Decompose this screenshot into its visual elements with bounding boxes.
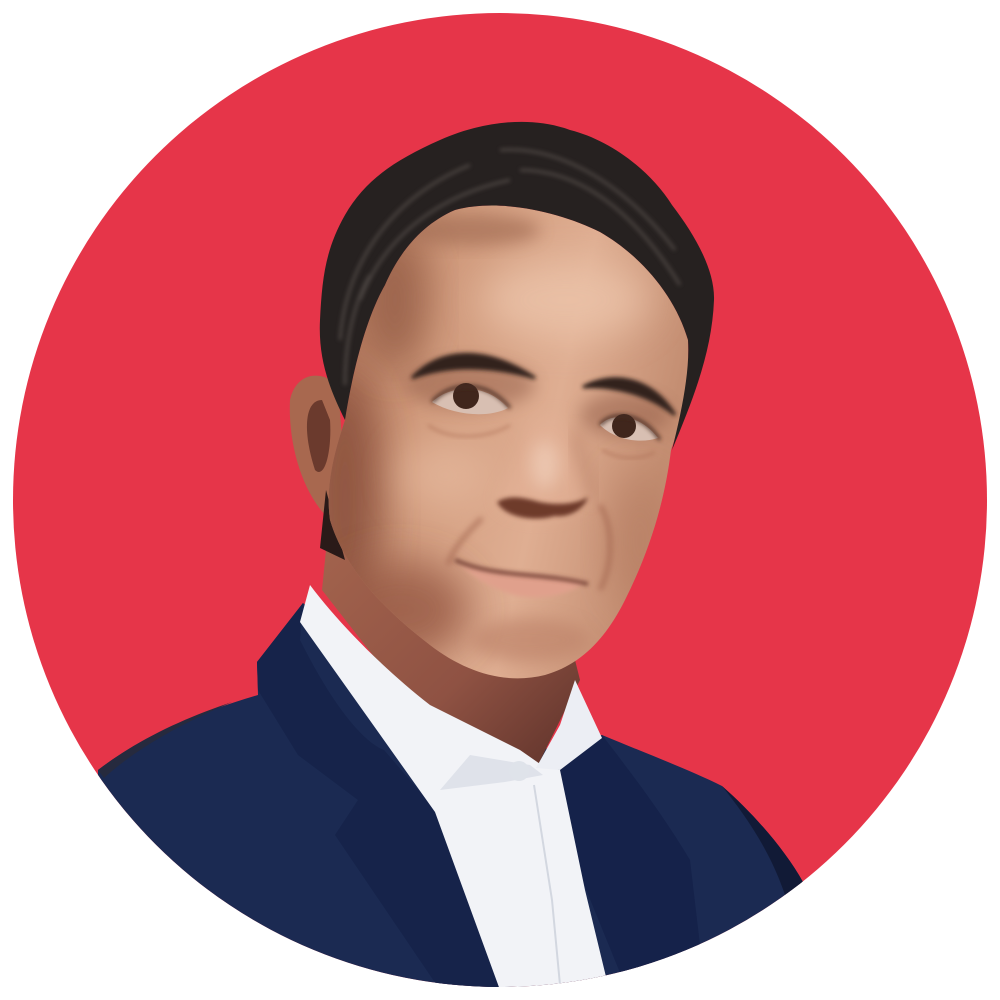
face shading — [307, 214, 670, 662]
left eye — [428, 383, 510, 436]
shadow behind jaw — [320, 490, 345, 560]
hair highlights — [340, 150, 680, 385]
person — [98, 122, 803, 1000]
right eye — [600, 414, 660, 458]
left eyebrow — [412, 354, 535, 378]
jacket — [98, 603, 803, 1000]
right eyebrow — [583, 379, 675, 415]
neck — [322, 550, 580, 763]
mouth — [455, 560, 588, 597]
smile lines — [448, 505, 610, 590]
shirt — [300, 585, 608, 990]
hair — [320, 122, 714, 450]
nose — [494, 435, 591, 522]
ear — [290, 376, 345, 518]
face — [307, 206, 688, 678]
